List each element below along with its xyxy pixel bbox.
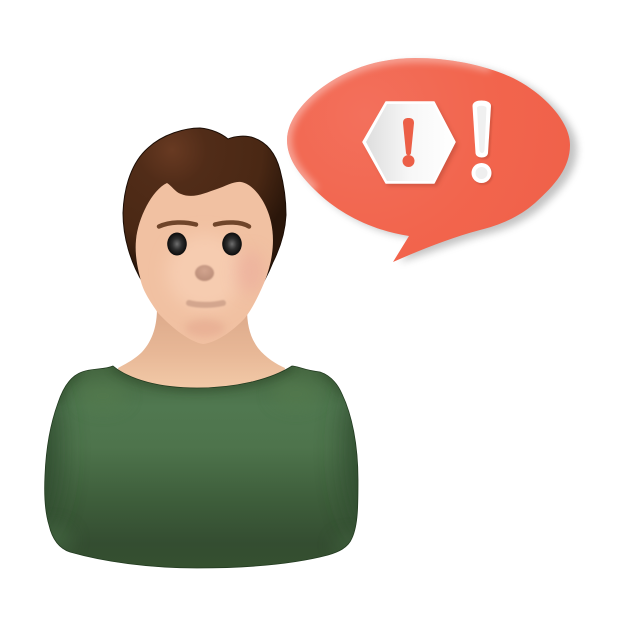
bubble shadow bbox=[294, 62, 577, 262]
speech bubble bbox=[280, 50, 580, 270]
right eyebrow bbox=[215, 222, 249, 226]
neck bbox=[118, 308, 285, 392]
white exclamation mark bbox=[472, 100, 493, 185]
hexagon warning sign bbox=[363, 102, 458, 186]
right eye bbox=[222, 232, 242, 256]
illustration: person with warning speech bubble bbox=[44, 58, 581, 568]
face bbox=[136, 182, 273, 344]
left eyebrow bbox=[159, 222, 196, 226]
nose bbox=[195, 265, 214, 281]
mouth bbox=[189, 303, 223, 305]
left eye bbox=[167, 232, 187, 256]
red exclamation mark bbox=[402, 118, 414, 167]
hair bbox=[123, 128, 286, 300]
shirt bbox=[44, 366, 358, 568]
person bbox=[44, 128, 358, 568]
bubble body bbox=[287, 58, 570, 262]
